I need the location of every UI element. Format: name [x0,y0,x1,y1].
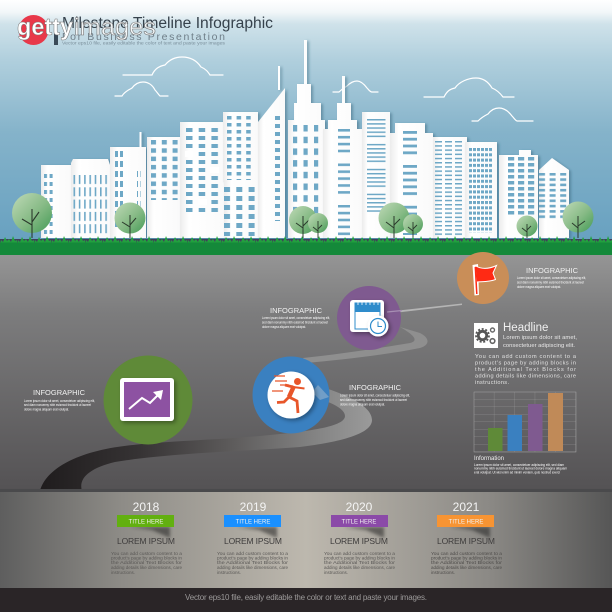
text block: milestone 4: sed diam nonummy nibh euismod tincidunt ut laoreet [517,280,584,284]
watermark [17,14,156,41]
building 13 [465,142,497,238]
sky background [0,0,612,240]
bar 2 blue [508,415,522,451]
main title: Milestone Timeline Infographic [62,15,273,32]
text block: milestone 2 [340,385,410,406]
description paragraph [475,354,577,386]
building 14 [499,150,538,238]
tree 2 [114,202,146,238]
circle blue [252,356,330,434]
building 5 [180,122,224,238]
building 15 [539,158,569,238]
timeline item 2019: product's page by adding blocks in [217,556,289,560]
winding road [40,304,462,491]
footer bar [0,588,612,612]
text block: milestone 3 [262,308,330,329]
text block: milestone 1: INFOGRAPHIC [33,390,85,397]
badge bar [54,33,58,45]
bar 1 green [488,428,502,451]
building 10 [362,112,390,238]
trees [12,193,594,238]
timeline item 2021: TITLE HERE [449,520,483,526]
timeline item 2019: You can add custom content to a [217,551,289,556]
timeline item 2021: You can add custom content to a [431,551,503,556]
chart information note: erat volutpat. Ut wisi enim ad minim veniam, quis nostrud exerci [474,470,560,474]
building 3 [110,132,146,238]
timeline item 2020: the Additional Text Blocks for [324,560,396,565]
building 4 [147,137,180,238]
description paragraph: instructions. [475,380,509,386]
timeline item 2021: instructions. [431,570,455,575]
building 7 peaked tower [258,66,285,238]
timeline item 2018: TITLE HERE [129,520,163,526]
watermark: getty [17,14,74,41]
road line over circle [387,310,402,312]
timeline item 2020: 2020 [346,500,373,514]
description paragraph: adding details like dimensions, care [475,374,576,380]
timeline item 2021: the Additional Text Blocks for [431,560,503,565]
timeline item 2018: adding details like dimensions, care [111,565,183,570]
subheading: consectetuer adipiscing elit. [503,343,575,349]
circle orange [457,252,509,304]
building 9 antenna tower [323,76,362,238]
grey ground [0,255,612,491]
clouds [115,57,533,121]
milestone 3: calendar [337,286,402,350]
icon: gears [474,323,498,348]
text block: milestone 2: INFOGRAPHIC [349,385,401,392]
description paragraph: You can add custom content to a [475,354,577,360]
title block [18,15,273,46]
timeline item 2019: 2019 [240,500,267,514]
tree 7 [516,216,538,238]
text block: milestone 1: Lorem ipsum dolor sit amet, consectetuer adipiscing elit, [24,399,95,403]
text block: milestone 4 [517,268,586,289]
text block: milestone 3: sed diam nonummy nibh euismod tincidunt ut laoreet [262,320,328,324]
bar 4 orange [548,393,563,451]
tree 6 [403,214,423,238]
timeline item 2018: product's page by adding blocks in [111,556,183,560]
subtitle: For Business Presentation [62,31,225,43]
icon: calendar and clock [350,300,388,336]
building 6 [223,112,260,238]
timeline item 2019: TITLE HERE [236,520,270,526]
text block: milestone 1: dolore magna aliquam erat volutpat. [24,408,69,412]
circle purple [337,286,401,350]
text block: milestone 4: Lorem ipsum dolor sit amet, consectetuer adipiscing elit, [517,276,586,280]
headline panel [474,322,577,386]
timeline item 2019: the Additional Text Blocks for [217,560,289,565]
tree 4 [308,213,328,238]
timeline item 2020: adding details like dimensions, care [324,565,396,570]
icon: running figure [268,372,314,418]
bar chart [474,392,576,452]
timeline item 2019 [217,500,289,575]
text block: milestone 4: INFOGRAPHIC [526,268,578,275]
red badge [18,15,48,45]
text block: milestone 2: Lorem ipsum dolor sit amet, consectetuer adipiscing elit, [340,394,410,398]
timeline item 2020: You can add custom content to a [324,551,396,556]
timeline item 2021: product's page by adding blocks in [431,556,503,560]
text block: milestone 4: dolore magna aliquam erat volutpat. [517,285,561,289]
timeline item 2020: product's page by adding blocks in [324,556,396,560]
city skyline [41,40,569,238]
timeline item 2019: LOREM IPSUM [224,536,282,546]
footer bar: Vector eps10 file, easily editable the color or text and paste your images. [185,593,427,602]
timeline item 2018 [111,500,183,575]
description paragraph: the Additional Text Blocks for [475,367,576,373]
timeline item 2021: LOREM IPSUM [437,536,495,546]
chart information note [474,456,567,474]
timeline item 2020: instructions. [324,570,348,575]
bar 3 purple [528,404,542,451]
timeline item 2020 [324,500,396,575]
timeline item 2019: instructions. [217,570,241,575]
icon: chart board [120,378,174,421]
text block: milestone 1 [24,390,95,412]
timeline item 2018: You can add custom content to a [111,551,183,556]
timeline item 2018: the Additional Text Blocks for [111,560,183,565]
building 1 [41,165,72,238]
text block: milestone 3: Lorem ipsum dolor sit amet, consectetuer adipiscing elit, [262,316,330,320]
timeline item 2021 [431,500,503,575]
translucent road overlay [312,385,329,400]
text block: milestone 3: INFOGRAPHIC [270,308,322,315]
timeline item 2020: LOREM IPSUM [330,536,388,546]
tree 1 [12,193,52,238]
chart information note: Lorem ipsum dolor sit amet, consectetuer adipiscing elit, sed diam [474,463,564,467]
subheading [503,335,577,349]
timeline item 2018: instructions. [111,570,135,575]
building 8 central spire [288,40,325,238]
circle green [104,356,192,444]
tree 8 [562,202,594,238]
timeline item 2020: TITLE HERE [342,520,376,526]
tree 3 [289,206,317,238]
tree 5 [378,202,410,238]
building 2 [71,159,110,238]
description paragraph: product's page by adding blocks in [475,360,576,366]
icon: red flag [472,264,496,296]
milestone 1: growth chart [104,356,192,444]
timeline item 2018: 2018 [133,500,160,514]
subheading: Lorem ipsum dolor sit amet, [503,335,577,341]
timeline item 2019: adding details like dimensions, care [217,565,289,570]
milestone 2: runner [252,356,330,434]
text block: milestone 1: sed diam nonummy nibh euismod tincidunt ut laoreet [24,403,91,407]
timeline item 2021: adding details like dimensions, care [431,565,503,570]
heading: Headline [503,322,548,334]
watermark: images [74,14,156,41]
building 11 [390,123,433,238]
timeline item 2021: 2021 [453,500,480,514]
text block: milestone 2: sed diam nonummy nibh euismod tincidunt ut laoreet [340,398,407,402]
timeline item 2018: LOREM IPSUM [117,536,175,546]
chart information note: nonummy nibh euismod tincidunt ut laoreet dolore magna aliquam [474,466,567,470]
timeline panel [0,489,612,588]
chart information note: Information [474,456,504,462]
building 12 [433,137,467,238]
text block: milestone 3: dolore magna aliquam erat volutpat. [262,325,306,329]
small caption: Vector eps10 file, easily editable the color of text and paste your images [62,40,226,46]
grass strip [0,235,612,255]
text block: milestone 2: dolore magna aliquam erat volutpat. [340,402,385,406]
milestone 4: flag [457,252,509,304]
